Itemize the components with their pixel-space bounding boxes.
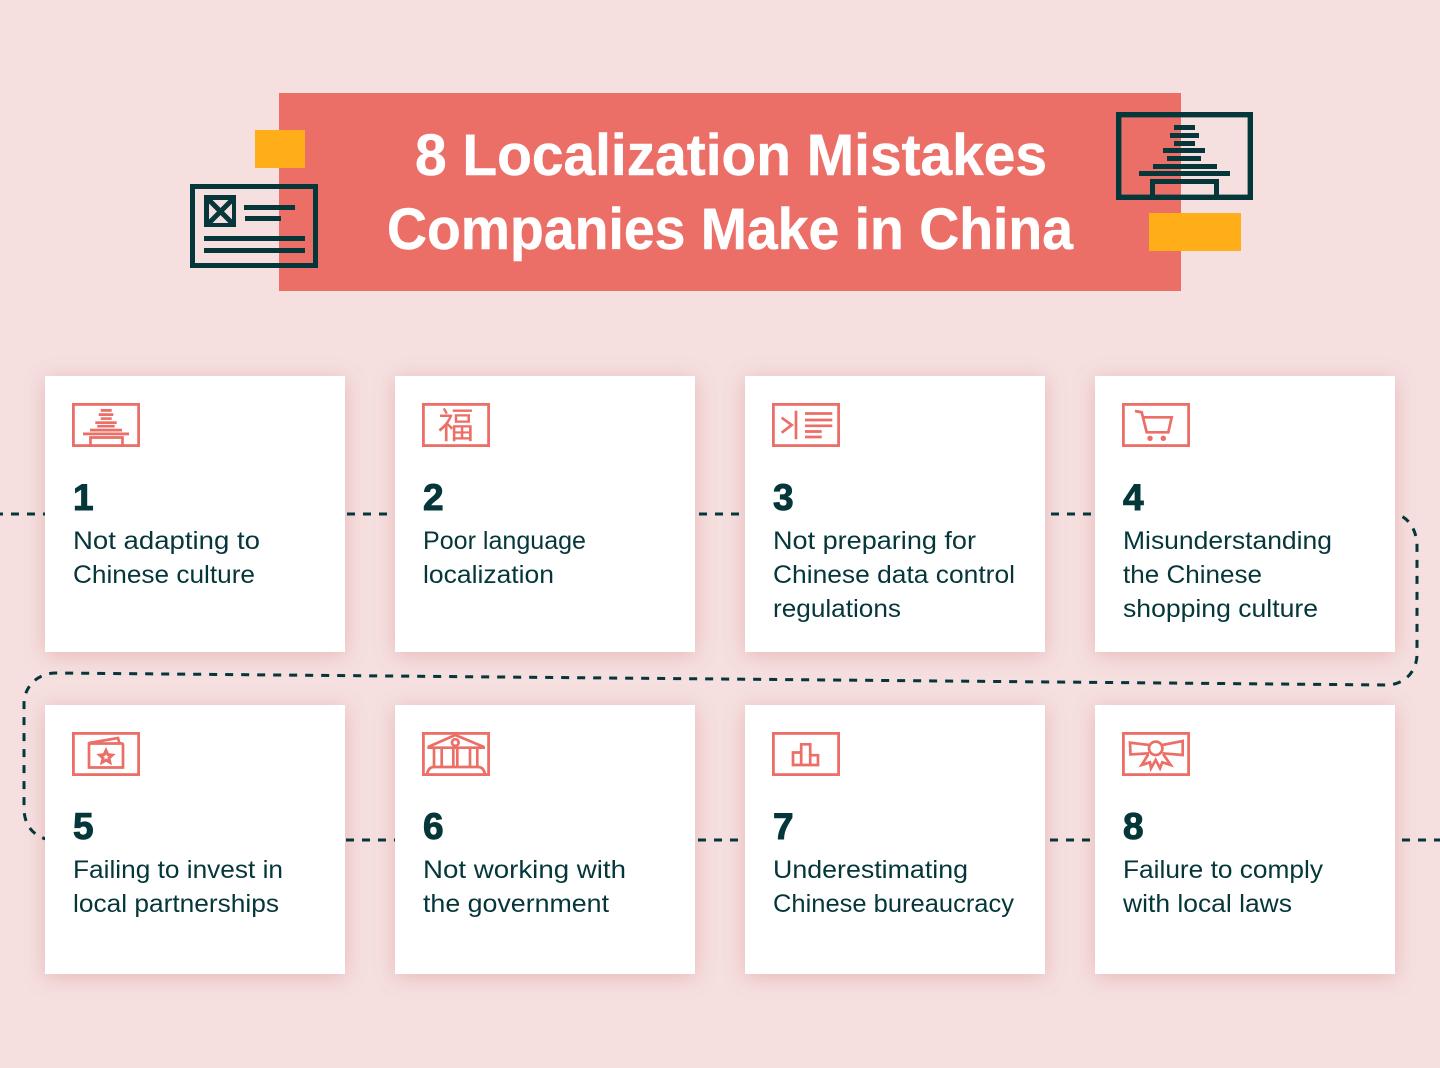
- card 7: Underestimating: [773, 856, 968, 884]
- dashed connector path: [0, 514, 1440, 840]
- card 3: Not preparing for: [773, 527, 976, 555]
- card 8: 8: [1123, 806, 1144, 847]
- card 5: Failing to invest in: [73, 856, 283, 884]
- title banner: [279, 93, 1181, 291]
- card 3: Chinese data control: [773, 561, 1015, 589]
- card 1: Chinese culture: [73, 561, 255, 589]
- icon: star wallet: [73, 733, 139, 775]
- card 7: [745, 705, 1045, 974]
- card 8: with local laws: [1122, 890, 1292, 918]
- accent: large yellow block: [1149, 213, 1241, 251]
- icon: text direction: [773, 404, 839, 446]
- icon: pagoda: [73, 404, 139, 446]
- title: Companies Make in China: [387, 197, 1074, 262]
- card 5: 5: [73, 806, 94, 847]
- card 5: [45, 705, 345, 974]
- icon: fu character: 福: [438, 397, 474, 449]
- icon: government building: [423, 733, 489, 775]
- card 1: [45, 376, 345, 652]
- card 2: [395, 376, 695, 652]
- card shadows: [45, 376, 1395, 974]
- card 6: Not working with: [423, 856, 626, 884]
- card 4: [1095, 376, 1395, 652]
- icon: pagoda monitor: [1119, 115, 1250, 198]
- card 4: the Chinese: [1123, 561, 1262, 589]
- card 7: 7: [773, 806, 794, 847]
- card 2: 2: [423, 477, 444, 518]
- card 4: shopping culture: [1123, 595, 1318, 623]
- icon: bar chart: [773, 733, 839, 775]
- title: 8 Localization Mistakes: [415, 123, 1047, 188]
- card 3: 3: [773, 477, 794, 518]
- card 2: Poor language: [423, 527, 586, 555]
- card 5: local partnerships: [73, 890, 279, 918]
- card 8: Failure to comply: [1123, 856, 1324, 884]
- card 3: [745, 376, 1045, 652]
- card 3: regulations: [773, 595, 901, 623]
- card 6: [395, 705, 695, 974]
- card 2: localization: [423, 561, 554, 589]
- card 8: [1095, 705, 1395, 974]
- accent: small yellow block: [255, 130, 305, 168]
- icon: fu character: [423, 397, 489, 449]
- icon: business card: [192, 186, 316, 266]
- card 4: 4: [1123, 477, 1144, 518]
- card 4: Misunderstanding: [1123, 527, 1332, 555]
- icon: shopping cart: [1123, 404, 1189, 446]
- card 6: the government: [423, 890, 609, 918]
- card 1: 1: [73, 477, 94, 518]
- title: [387, 123, 1074, 262]
- icon: diploma ribbon: [1123, 733, 1189, 775]
- card 6: 6: [423, 806, 444, 847]
- card 7: Chinese bureaucracy: [773, 890, 1015, 918]
- card 1: Not adapting to: [73, 527, 260, 555]
